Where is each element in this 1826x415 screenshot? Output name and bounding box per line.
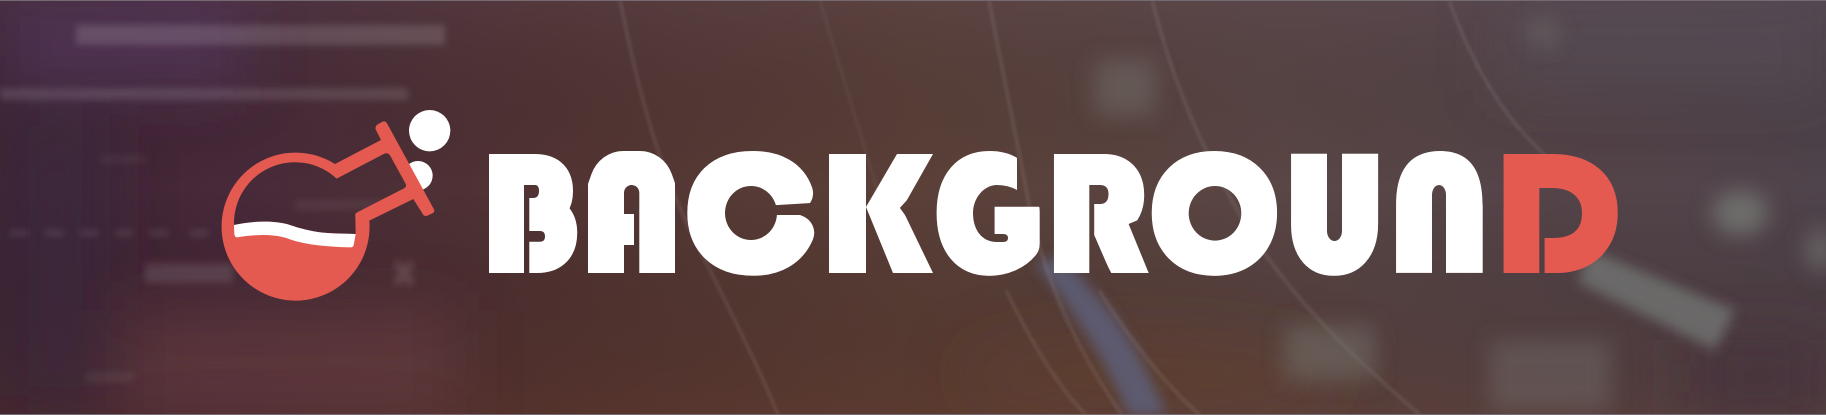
title: BACKGROUND: B: [494, 141, 570, 287]
title: BACKGROUND: A: [597, 164, 667, 276]
title: BACKGROUND: D: [1510, 141, 1608, 287]
title: BACKGROUND: R: [1059, 139, 1138, 287]
icon: liquid highlight: [234, 222, 356, 247]
title: BACKGROUND: G: [946, 142, 1032, 286]
title: BACKGROUND: [489, 151, 1618, 276]
title: BACKGROUND: C: [702, 145, 798, 283]
title: BACKGROUND: N: [1408, 150, 1471, 275]
icon: tilted flask with bubbles: [222, 110, 450, 301]
icon: large bubble: [409, 110, 450, 151]
title: BACKGROUND: U: [1300, 147, 1369, 283]
title: BACKGROUND: K: [835, 141, 919, 285]
icon: small bubble: [403, 161, 433, 190]
icon: flask body: [222, 121, 434, 301]
title: BACKGROUND: O: [1163, 141, 1266, 286]
